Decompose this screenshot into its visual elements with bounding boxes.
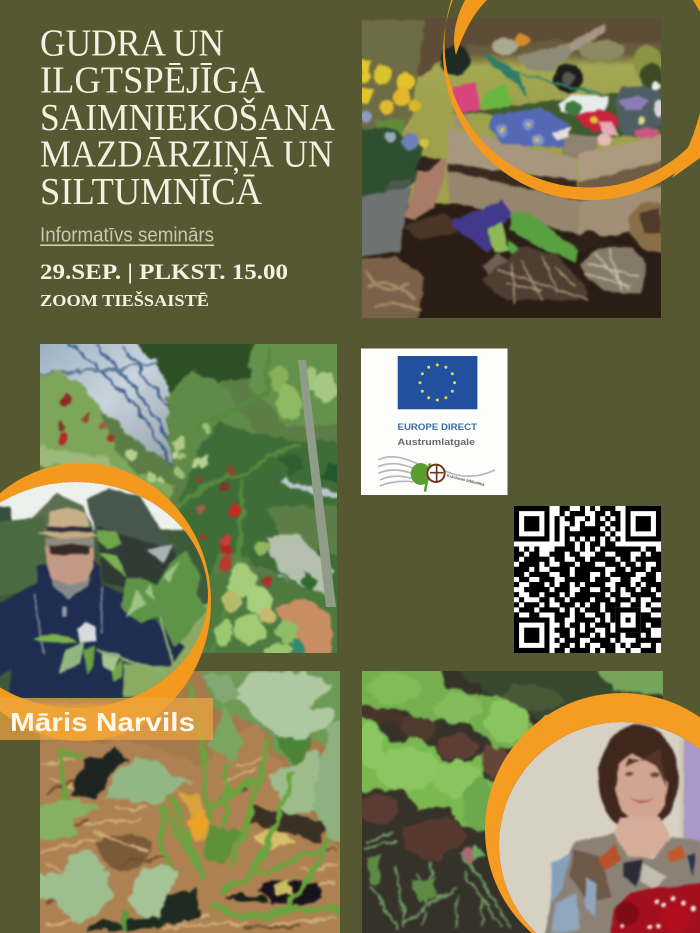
title: MAZDĀRZIŅĀ UN	[40, 134, 333, 176]
logo panel: Europe Direct	[361, 348, 508, 495]
photo: garden crate with flowers	[362, 18, 661, 318]
title: ILGTSPĒJĪGA	[40, 60, 266, 102]
label: Austrumlatgale: Austrumlatgale	[398, 437, 475, 448]
icon: EU flag	[398, 356, 477, 409]
title	[40, 22, 336, 213]
QR code	[514, 506, 661, 653]
greenhouse support pole	[298, 360, 336, 607]
location: ZOOM TIEŠSAISTĒ	[40, 291, 209, 310]
date and time: 29.SEP. | PLKST. 15.00	[40, 259, 288, 284]
portrait: Māris Narvils	[0, 482, 208, 704]
name banner: Māris Narvils: Māris Narvils	[10, 707, 195, 737]
icon: library logo with waves	[378, 457, 495, 492]
label: Europe Direct: EUROPE DIRECT	[398, 422, 477, 433]
name banner: Māris Narvils	[0, 698, 213, 740]
orange ring around portrait: Māris Narvils	[0, 463, 211, 741]
title: SILTUMNĪCĀ	[40, 171, 263, 213]
portrait: woman with roses	[499, 722, 700, 933]
orange brush ring over garden photo	[443, 0, 700, 200]
photo: lettuce beds	[362, 671, 663, 933]
photo: zucchini plants in straw	[40, 671, 340, 933]
title: GUDRA UN	[40, 22, 224, 64]
title: SAIMNIEKOŠANA	[40, 97, 336, 139]
icon: library logo with waves: Krāslavas bibliotēka	[446, 473, 486, 487]
orange ring around woman portrait	[485, 693, 700, 933]
subtitle: informative seminar: Informatīvs seminārs	[40, 224, 214, 246]
photo: greenhouse tomatoes	[40, 344, 337, 653]
